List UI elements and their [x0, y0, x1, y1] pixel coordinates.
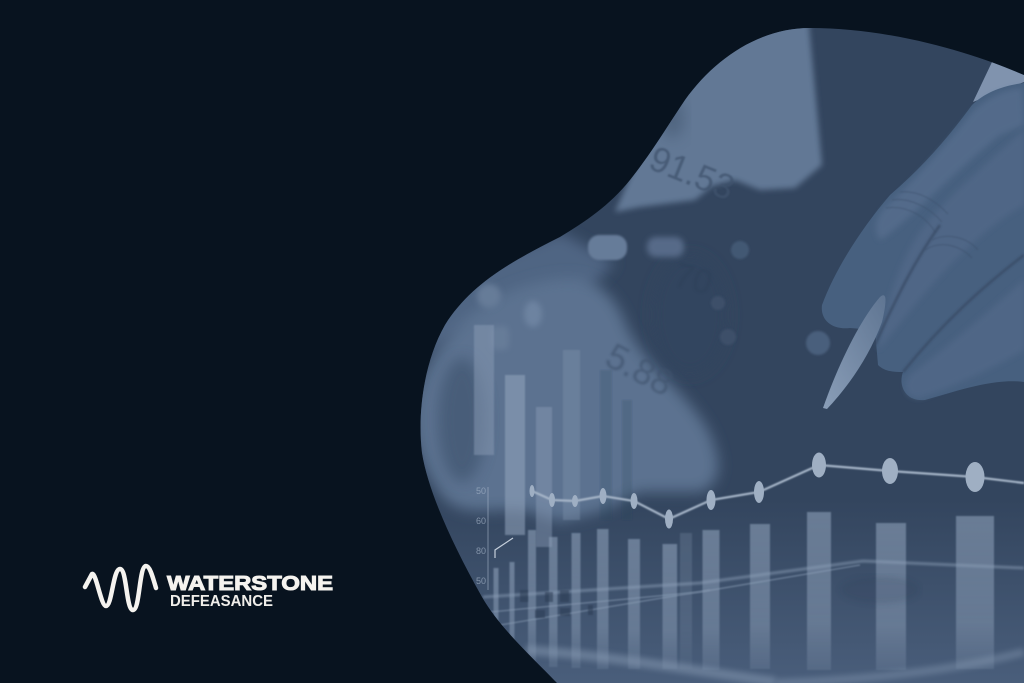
tablet edge lines [483, 561, 1024, 683]
chart axis: 80 [476, 546, 486, 556]
bar chart [494, 512, 994, 670]
dark screen upper center [652, 255, 728, 375]
logo subtitle: DEFEASANCE [170, 593, 273, 610]
line chart [530, 452, 1024, 528]
pen top [973, 62, 1024, 102]
chart axis: 50 [476, 486, 486, 496]
right hand [822, 83, 1024, 400]
logo wordmark: WATERSTONE [167, 572, 333, 595]
lower glow [458, 551, 1024, 683]
chart axis: 60 [476, 516, 486, 526]
index finger highlight [876, 88, 1024, 240]
dark finger shadow [438, 358, 486, 482]
tablet reflected screen details [520, 576, 920, 618]
chart axis: 50 [476, 576, 486, 586]
pen [823, 295, 886, 409]
floating number 91.53: 91.53 [644, 139, 740, 208]
floating number 5.88: 5.88 [599, 335, 680, 404]
knuckle wrinkles [889, 192, 969, 248]
blurred light background area, upper [615, 15, 822, 212]
hand mass [822, 83, 1024, 400]
floating number fragment: 70 [670, 256, 716, 303]
chart axis [476, 486, 513, 590]
bokeh highlights [477, 235, 830, 355]
logo [85, 566, 333, 610]
blurred left hand [410, 232, 718, 522]
photo blob: finance chart and hands [410, 15, 1024, 683]
blurred dark left of upper area [664, 105, 686, 138]
wrist band [432, 232, 615, 353]
chart data points [530, 452, 984, 528]
second finger highlight [888, 141, 1021, 332]
tall background bars [474, 325, 632, 547]
logo wave icon [85, 566, 156, 610]
third finger highlight [906, 291, 1021, 398]
blob base tone [410, 20, 1024, 683]
finger gaps [875, 225, 940, 345]
